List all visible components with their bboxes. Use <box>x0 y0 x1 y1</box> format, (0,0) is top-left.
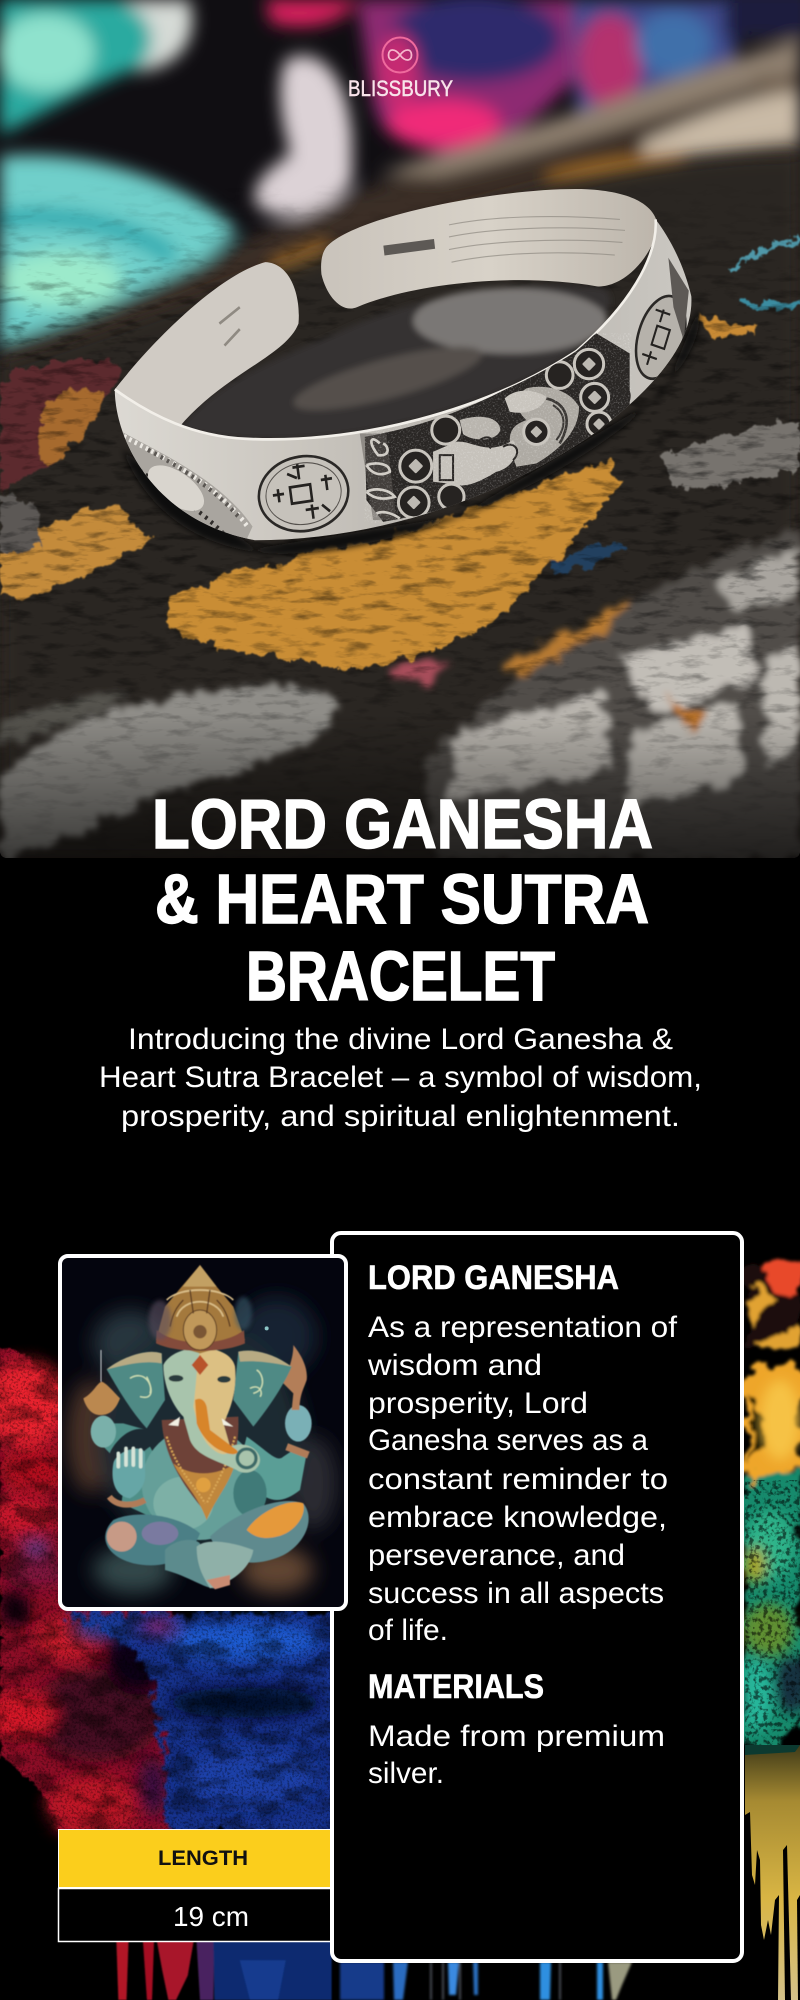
body: Lord Ganesha description: perseverance, and <box>368 1539 625 1572</box>
seated body <box>83 1265 312 1589</box>
body: Lord Ganesha description: success in all aspects <box>368 1577 664 1610</box>
heading: Lord Ganesha: LORD GANESHA <box>368 1259 619 1297</box>
title: & HEART SUTRA <box>155 860 649 938</box>
panel: Ganesha illustration <box>60 1256 346 1609</box>
body: Lord Ganesha description: constant reminder to <box>368 1463 668 1496</box>
coin <box>258 454 350 533</box>
brand name: BLISSBURY <box>348 76 453 101</box>
length header <box>58 1830 334 1888</box>
intro paragraph: Introducing the divine Lord Ganesha & <box>128 1023 673 1056</box>
logo <box>348 38 453 101</box>
yellow paint drips <box>745 1745 800 2000</box>
paint patches <box>0 236 800 668</box>
crossed legs <box>105 1515 200 1565</box>
body: Lord Ganesha description: Ganesha serves as a <box>368 1424 649 1457</box>
soft out-of-focus patches in the foreground <box>0 527 800 860</box>
body: Lord Ganesha description: prosperity, Lord <box>368 1387 588 1420</box>
ring interior reflection <box>179 285 610 439</box>
body: Lord Ganesha description <box>367 1311 678 1647</box>
bottom drips under the panel <box>340 1962 632 2000</box>
blue powder splash <box>61 1613 337 1833</box>
length value cell <box>58 1888 334 1942</box>
blurred graffiti backdrop <box>0 0 800 770</box>
right colour splash <box>741 1262 800 2000</box>
watercolor bloom <box>67 1297 337 1593</box>
body: materials description: Made from premium <box>368 1720 665 1753</box>
hero photo: silver bracelet on painted wood <box>0 0 800 860</box>
head and trunk <box>163 1348 260 1473</box>
body: Lord Ganesha description: wisdom and <box>367 1349 542 1382</box>
body: Lord Ganesha description: As a representation of <box>368 1311 678 1344</box>
paint splash background <box>0 1262 800 2000</box>
body: Lord Ganesha description: embrace knowledge, <box>368 1501 667 1534</box>
right coin <box>634 294 687 380</box>
title: LORD GANESHA <box>152 785 653 863</box>
panel: description <box>332 1233 742 1961</box>
arms <box>121 1446 153 1516</box>
left inner surface <box>115 262 299 428</box>
length value: 19 cm <box>173 1901 249 1932</box>
dark painted wood table <box>0 154 800 860</box>
left dragon scales <box>122 432 252 538</box>
logo icon: infinity in circle <box>382 38 418 72</box>
contact shadow <box>122 307 700 554</box>
bracelet <box>115 189 700 554</box>
crown <box>156 1265 245 1353</box>
left red powder splash <box>0 1350 173 1833</box>
spec table: length <box>58 1830 334 1942</box>
wood cracks texture <box>0 197 800 806</box>
relief: Ganesha with coins <box>360 333 631 523</box>
title: BRACELET <box>246 937 555 1015</box>
outer band <box>115 219 691 540</box>
body: materials description <box>368 1720 665 1790</box>
heading: Materials: MATERIALS <box>368 1668 544 1706</box>
body: materials description: silver. <box>368 1757 444 1790</box>
bottom vignette <box>0 713 800 860</box>
intro paragraph <box>99 1023 702 1133</box>
ears <box>107 1352 165 1428</box>
raised hand <box>112 1449 145 1498</box>
body: Lord Ganesha description: of life. <box>368 1614 448 1647</box>
bottom paint drips <box>116 1940 332 2000</box>
intro paragraph: Heart Sutra Bracelet – a symbol of wisdom, <box>99 1061 702 1094</box>
intro paragraph: prosperity, and spiritual enlightenment. <box>121 1100 680 1133</box>
title <box>152 785 653 1015</box>
hands holding lotus and goad <box>91 1416 116 1448</box>
length label: LENGTH <box>158 1847 248 1870</box>
back inner surface <box>321 189 658 309</box>
